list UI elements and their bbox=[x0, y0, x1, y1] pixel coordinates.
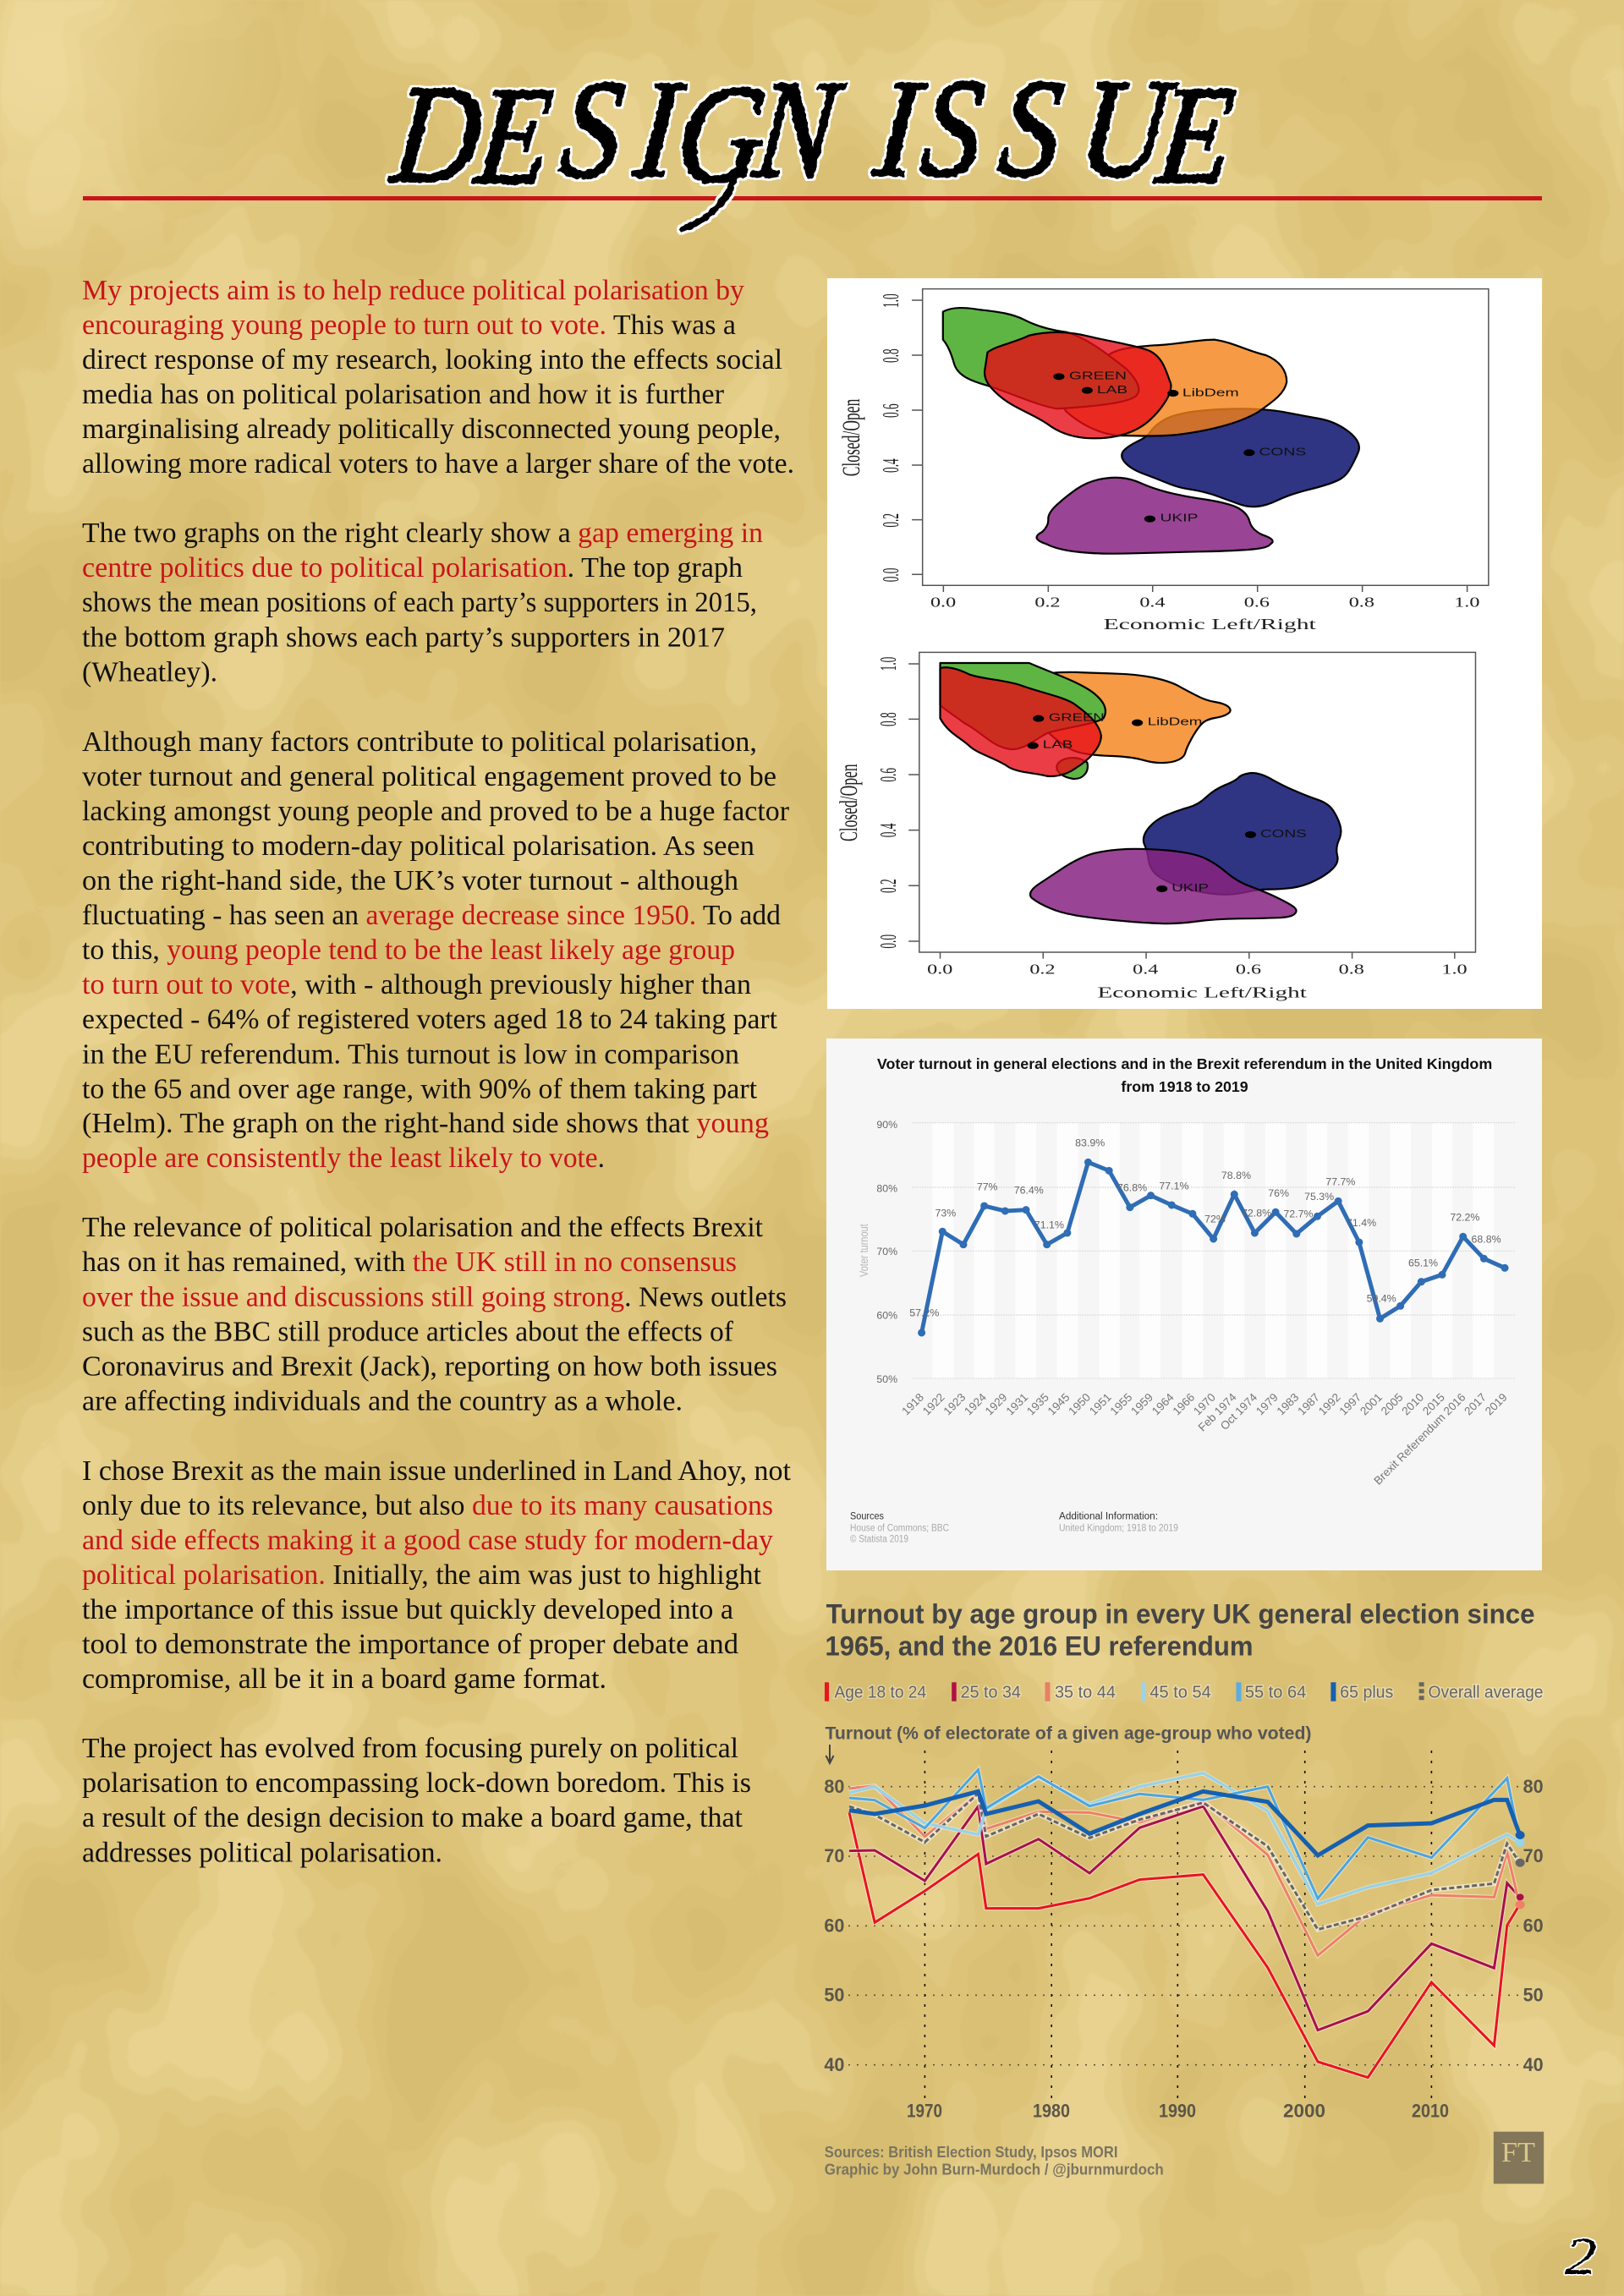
y axis labels: 80% bbox=[876, 1183, 897, 1194]
axis tick labels: 1.0 bbox=[875, 657, 901, 671]
paragraph: project aim: encouraging young people to turn out to vote. This was a bbox=[82, 310, 736, 341]
panel: Statista voter turnout chart bbox=[826, 1038, 1542, 1570]
axis title: y: Closed/Open bbox=[835, 764, 863, 841]
x axis year labels: 1935 bbox=[1024, 1391, 1051, 1417]
x axis year labels bbox=[907, 2100, 1449, 2121]
axis tick labels: 0.6 bbox=[875, 768, 901, 782]
x axis year labels: 1951 bbox=[1087, 1391, 1114, 1417]
y axis labels: 40 bbox=[824, 2054, 844, 2075]
x axis year labels: 1959 bbox=[1128, 1391, 1155, 1417]
paragraph: project evolution: addresses political polarisation. bbox=[82, 1837, 442, 1869]
series: 65 plus bbox=[849, 1791, 1520, 1855]
legend: 65 plus bbox=[1340, 1683, 1393, 1701]
paragraph: relevance of Brexit: are affecting individuals and the country as a whole. bbox=[82, 1385, 683, 1417]
axis title: x: Economic Left/Right bbox=[1104, 616, 1316, 633]
axis tick labels: 1.0 bbox=[1441, 962, 1468, 977]
line chart: voter turnout 1918 to 2019 bbox=[858, 1056, 1515, 1385]
data labels: 77.1% bbox=[1159, 1181, 1189, 1192]
party markers and labels: LibDem bbox=[1148, 715, 1202, 728]
paragraph: relevance of Brexit: The relevance of political polarisation and the effects Brexit bbox=[82, 1212, 764, 1243]
y axis labels: 50 bbox=[1523, 1985, 1544, 2006]
y axis labels: 40 bbox=[1523, 2054, 1544, 2075]
y axis labels: 80 bbox=[824, 1776, 844, 1797]
axis tick labels: 0.4 bbox=[875, 824, 901, 837]
chart title bbox=[877, 1056, 1492, 1095]
paragraph: voter turnout: to the 65 and over age range, with 90% of them taking part bbox=[82, 1074, 758, 1104]
x axis year labels: 2015 bbox=[1420, 1391, 1447, 1417]
party markers and labels: CONS bbox=[1259, 446, 1306, 458]
sources note: Additional Information: bbox=[1059, 1512, 1158, 1522]
series: 25 to 34 bbox=[849, 1806, 1520, 2030]
x axis year labels: 1931 bbox=[1003, 1391, 1030, 1417]
y axis labels: 80 bbox=[1523, 1776, 1544, 1797]
axis tick labels: 0.8 bbox=[1339, 962, 1364, 977]
y axis labels: 50 bbox=[824, 1985, 844, 2006]
sources note: Sources bbox=[850, 1512, 884, 1522]
sources note: House of Commons; BBC bbox=[850, 1524, 949, 1534]
x axis year labels: 1992 bbox=[1316, 1391, 1343, 1417]
paragraph: voter turnout: to turn out to vote, with - although previously higher than bbox=[82, 969, 751, 1000]
y axis labels bbox=[876, 1120, 897, 1385]
party markers and labels: UKIP bbox=[1171, 881, 1209, 894]
legend: 55 to 64 bbox=[1245, 1683, 1306, 1701]
x axis year labels: 2010 bbox=[1412, 2100, 1449, 2121]
legend: Overall average bbox=[1428, 1683, 1543, 1701]
blob: Labour supporters bbox=[985, 332, 1171, 438]
axis tick labels: 0.2 bbox=[1034, 595, 1061, 610]
legend: 25 to 34 bbox=[961, 1683, 1021, 1701]
party markers and labels bbox=[1028, 711, 1307, 894]
x axis year labels: 2000 bbox=[1283, 2100, 1325, 2121]
paragraph: project aim: marginalising already politically disconnected young people, bbox=[82, 414, 781, 445]
y axis labels: 70% bbox=[876, 1247, 897, 1258]
panel: FT turnout by age group bbox=[824, 1598, 1544, 2184]
source credits bbox=[825, 2144, 1164, 2178]
paragraph: relevance of Brexit: Coronavirus and Brexit (Jack), reporting on how both issues bbox=[82, 1351, 777, 1382]
paragraph: relevance of Brexit bbox=[82, 1212, 787, 1417]
paragraph: voter turnout: voter turnout and general political engagement proved to be bbox=[82, 761, 776, 792]
paragraph: project aim bbox=[82, 275, 794, 479]
grid lines bbox=[848, 1787, 1522, 2065]
blob: Lib Dem supporters bbox=[1023, 672, 1231, 763]
series: 45 to 54 bbox=[849, 1773, 1520, 1904]
party markers and labels bbox=[1053, 370, 1306, 524]
data labels: 71.1% bbox=[1034, 1219, 1064, 1230]
paragraph: voter turnout: fluctuating - has seen an average decrease since 1950. To add bbox=[82, 900, 781, 931]
party markers and labels: LAB bbox=[1097, 383, 1127, 396]
data labels: 72.7% bbox=[1283, 1208, 1314, 1219]
paragraph: project evolution: polarisation to encompassing lock-down boredom. This is bbox=[82, 1767, 751, 1799]
axis tick labels: 0.8 bbox=[1349, 595, 1374, 610]
paragraph: project evolution: The project has evolved from focusing purely on political bbox=[82, 1733, 738, 1764]
data labels: 71.4% bbox=[1347, 1218, 1376, 1229]
x axis year labels: Feb 1974 bbox=[1196, 1390, 1239, 1433]
blob: Conservative supporters bbox=[1144, 773, 1341, 895]
sources note bbox=[850, 1512, 1178, 1544]
party markers and labels: LAB bbox=[1043, 738, 1073, 750]
x axis year labels: 2019 bbox=[1483, 1391, 1510, 1417]
data labels: 77.7% bbox=[1325, 1176, 1355, 1188]
title: DESIGN ISSUE bbox=[83, 52, 1542, 229]
paragraph: voter turnout: on the right-hand side, the UK’s voter turnout - although bbox=[82, 865, 738, 896]
data labels: 59.4% bbox=[1367, 1293, 1396, 1304]
panel: party position charts bbox=[827, 278, 1542, 1009]
paragraph: project aim: My projects aim is to help reduce political polarisation by bbox=[82, 275, 744, 306]
axis tick labels: 0.6 bbox=[1236, 962, 1261, 977]
x axis year labels bbox=[899, 1390, 1510, 1488]
paragraph: two graphs: The two graphs on the right clearly show a gap emerging in bbox=[82, 518, 763, 549]
y axis labels: 70 bbox=[1523, 1845, 1544, 1866]
line chart: turnout by age group bbox=[849, 1770, 1525, 2078]
blob: Conservative supporters bbox=[1122, 408, 1359, 507]
paragraph: project aim: direct response of my research, looking into the effects social bbox=[82, 344, 782, 375]
data labels bbox=[909, 1137, 1501, 1319]
paragraph: why Brexit: political polarisation. Initially, the aim was just to highlight bbox=[82, 1559, 762, 1591]
chart: party positions 2017 bbox=[835, 652, 1475, 1001]
paragraph: two graphs: centre politics due to political polarisation. The top graph bbox=[82, 552, 743, 584]
axis tick labels: 0.2 bbox=[878, 513, 903, 528]
paragraph: voter turnout: Although many factors contribute to political polarisation, bbox=[82, 726, 757, 758]
paragraph: voter turnout: contributing to modern-day political polarisation. As seen bbox=[82, 830, 754, 862]
x axis year labels: 2017 bbox=[1462, 1391, 1489, 1417]
axis tick labels: 0.2 bbox=[1029, 962, 1056, 977]
axis tick labels: 0.0 bbox=[930, 595, 956, 610]
series: overall average bbox=[849, 1794, 1520, 1930]
x axis year labels: 1983 bbox=[1275, 1391, 1301, 1417]
page number: 2 bbox=[1565, 2228, 1597, 2286]
paragraph: voter turnout: to this, young people tend to be the least likely age group bbox=[82, 934, 735, 966]
axis tick labels: 1.0 bbox=[878, 293, 903, 308]
chart heading bbox=[826, 1598, 1535, 1661]
series end dots bbox=[1516, 1831, 1525, 1909]
x axis year labels: 1929 bbox=[983, 1391, 1010, 1417]
axis tick labels: 1.0 bbox=[1454, 595, 1479, 610]
paragraph: why Brexit bbox=[82, 1455, 792, 1695]
paragraph: project evolution bbox=[82, 1733, 751, 1869]
axis tick labels: 0.0 bbox=[927, 962, 952, 977]
y axis labels: 60 bbox=[824, 1915, 844, 1937]
blob: UKIP supporters bbox=[1030, 849, 1297, 923]
data labels: 68.8% bbox=[1472, 1234, 1501, 1245]
chart heading: Turnout by age group in every UK general election since bbox=[826, 1598, 1535, 1629]
paragraph: voter turnout bbox=[82, 726, 790, 1174]
paragraph: relevance of Brexit: has on it has remained, with the UK still in no consensus bbox=[82, 1247, 737, 1278]
x axis year labels: 2010 bbox=[1399, 1391, 1426, 1417]
source credits: Sources: British Election Study, Ipsos MORI bbox=[825, 2144, 1118, 2161]
axis tick labels: 0.4 bbox=[1133, 962, 1158, 977]
source credits: Graphic by John Burn-Murdoch / @jburnmurdoch bbox=[825, 2162, 1164, 2178]
paragraph: why Brexit: I chose Brexit as the main issue underlined in Land Ahoy, not bbox=[82, 1455, 792, 1487]
data labels: 57.2% bbox=[909, 1307, 939, 1319]
paragraph: project evolution: a result of the design decision to make a board game, that bbox=[82, 1802, 743, 1833]
icon: FT logo bbox=[1494, 2132, 1544, 2184]
x axis year labels: 1964 bbox=[1149, 1390, 1177, 1417]
x axis year labels: 1997 bbox=[1336, 1391, 1363, 1417]
party markers and labels: GREEN bbox=[1049, 711, 1105, 724]
axis tick labels bbox=[875, 657, 1468, 977]
axis tick labels bbox=[878, 293, 1479, 610]
data labels: 72.2% bbox=[1450, 1212, 1479, 1223]
axis tick labels: 0.6 bbox=[1244, 595, 1270, 610]
x axis year labels: 1955 bbox=[1108, 1391, 1134, 1417]
paragraph: relevance of Brexit: such as the BBC still produce articles about the effects of bbox=[82, 1316, 734, 1348]
y axis labels: 70 bbox=[824, 1845, 844, 1866]
paragraph: voter turnout: lacking amongst young people and proved to be a huge factor bbox=[82, 796, 790, 827]
data labels: 83.9% bbox=[1075, 1137, 1105, 1149]
data labels: 76.8% bbox=[1117, 1182, 1147, 1193]
x axis year labels: 1970 bbox=[1191, 1391, 1218, 1417]
paragraph: project aim: media has on political polarisation and how it is further bbox=[82, 379, 725, 410]
blob: Green supporters bbox=[943, 308, 1138, 408]
party markers and labels: GREEN bbox=[1069, 370, 1127, 382]
icon: FT logo: FT bbox=[1501, 2137, 1535, 2168]
party markers and labels: CONS bbox=[1260, 827, 1307, 840]
icon: down arrow bbox=[826, 1745, 834, 1763]
paragraph: why Brexit: the importance of this issue but quickly developed into a bbox=[82, 1594, 733, 1625]
x axis year labels: 1918 bbox=[899, 1391, 926, 1417]
x axis year labels: 1950 bbox=[1066, 1391, 1093, 1417]
paragraph: why Brexit: only due to its relevance, but also due to its many causations bbox=[82, 1490, 773, 1521]
axis tick labels: 0.2 bbox=[875, 879, 901, 893]
y axis labels: 60 bbox=[1523, 1915, 1544, 1937]
y axis title: Voter turnout bbox=[858, 1224, 871, 1277]
sources note: United Kingdom; 1918 to 2019 bbox=[1059, 1524, 1178, 1534]
x axis year labels: 1970 bbox=[907, 2100, 942, 2121]
axis tick labels: 0.4 bbox=[1139, 595, 1166, 610]
data labels: 73% bbox=[935, 1208, 956, 1219]
data labels: 75.3% bbox=[1304, 1192, 1334, 1203]
paragraph: voter turnout: expected - 64% of registered voters aged 18 to 24 taking part bbox=[82, 1004, 778, 1035]
data labels: 76.4% bbox=[1014, 1185, 1044, 1197]
x axis year labels: 1945 bbox=[1045, 1391, 1073, 1417]
x axis year labels: 2005 bbox=[1379, 1391, 1406, 1417]
chart heading: 1965, and the 2016 EU referendum bbox=[826, 1630, 1254, 1661]
x axis year labels: Oct 1974 bbox=[1218, 1390, 1260, 1433]
paragraph: relevance of Brexit: over the issue and discussions still going strong. News outlets bbox=[82, 1282, 787, 1312]
party markers and labels: LibDem bbox=[1182, 386, 1239, 398]
paragraph: voter turnout: people are consistently the least likely to vote. bbox=[82, 1143, 605, 1174]
axis tick labels: 0.6 bbox=[878, 403, 903, 418]
axis tick labels: 0.8 bbox=[875, 712, 901, 726]
axis title: x: Economic Left/Right bbox=[1097, 984, 1307, 1001]
paragraph: why Brexit: and side effects making it a good case study for modern-day bbox=[82, 1525, 773, 1556]
data labels: 78.8% bbox=[1221, 1170, 1251, 1181]
x axis year labels: 1990 bbox=[1159, 2100, 1196, 2121]
axis title: y: Closed/Open bbox=[838, 399, 865, 476]
axis tick labels: 0.0 bbox=[875, 934, 901, 949]
paragraph: voter turnout: (Helm). The graph on the right-hand side shows that young bbox=[82, 1108, 769, 1139]
x axis year labels: 1923 bbox=[941, 1391, 968, 1417]
x axis year labels: 1924 bbox=[962, 1390, 989, 1417]
data labels: 65.1% bbox=[1408, 1258, 1438, 1269]
x axis year labels: 1922 bbox=[920, 1391, 947, 1417]
x axis year labels: 1980 bbox=[1033, 2100, 1070, 2121]
data labels: 77% bbox=[977, 1181, 998, 1192]
chart: party positions 2015 bbox=[838, 289, 1489, 633]
legend bbox=[825, 1682, 1543, 1701]
y axis labels: 50% bbox=[876, 1374, 897, 1385]
blob: Labour supporters bbox=[941, 667, 1101, 776]
legend: Age 18 to 24 bbox=[834, 1683, 926, 1701]
title: DESIGN ISSUE: DESIGN ISSUE bbox=[385, 52, 1241, 214]
body text column bbox=[82, 275, 794, 1869]
y axis labels: 90% bbox=[876, 1120, 897, 1131]
party markers and labels: UKIP bbox=[1160, 512, 1198, 524]
x axis year labels: 1979 bbox=[1254, 1391, 1281, 1417]
chart title: from 1918 to 2019 bbox=[1121, 1079, 1248, 1095]
axis tick labels: 0.4 bbox=[878, 458, 903, 473]
x axis year labels: 1987 bbox=[1295, 1391, 1322, 1417]
y axis labels: 60% bbox=[876, 1310, 897, 1321]
blob: UKIP supporters bbox=[1037, 478, 1273, 554]
y axis labels bbox=[824, 1776, 1544, 2075]
legend: 35 to 44 bbox=[1055, 1683, 1116, 1701]
data labels: 72% bbox=[1204, 1214, 1226, 1225]
paragraph: two graphs: the bottom graph shows each party’s supporters in 2017 bbox=[82, 622, 725, 653]
paragraph: two graphs: (Wheatley). bbox=[82, 656, 217, 688]
axis tick labels: 0.8 bbox=[878, 348, 903, 363]
legend: 45 to 54 bbox=[1149, 1683, 1211, 1701]
series: age 18 to 24 bbox=[849, 1812, 1520, 2078]
paragraph: voter turnout: in the EU referendum. This turnout is low in comparison bbox=[82, 1038, 739, 1071]
axis caption: Turnout (% of electorate of a given age-group who voted) bbox=[826, 1724, 1311, 1744]
x axis year labels: 2001 bbox=[1358, 1391, 1385, 1417]
paragraph: project aim: allowing more radical voters to have a larger share of the vote. bbox=[82, 448, 794, 479]
blob: Green supporters bbox=[941, 663, 1106, 779]
data labels: 76% bbox=[1268, 1188, 1289, 1199]
paragraph: two graphs bbox=[82, 518, 763, 688]
x axis year labels: 1966 bbox=[1170, 1391, 1197, 1417]
x axis year labels: Brexit Referendum 2016 bbox=[1371, 1391, 1468, 1488]
data labels: 72.8% bbox=[1242, 1208, 1271, 1219]
paragraph: why Brexit: tool to demonstrate the importance of proper debate and bbox=[82, 1629, 738, 1660]
series: 55 to 64 bbox=[849, 1770, 1520, 1899]
axis tick labels: 0.0 bbox=[878, 568, 903, 582]
sources note: © Statista 2019 bbox=[850, 1534, 908, 1544]
paragraph: two graphs: shows the mean positions of each party’s supporters in 2015, bbox=[82, 587, 757, 618]
paragraph: why Brexit: compromise, all be it in a board game format. bbox=[82, 1663, 606, 1695]
blob: Lib Dem supporters bbox=[1062, 340, 1287, 436]
series: 35 to 44 bbox=[849, 1786, 1520, 1955]
